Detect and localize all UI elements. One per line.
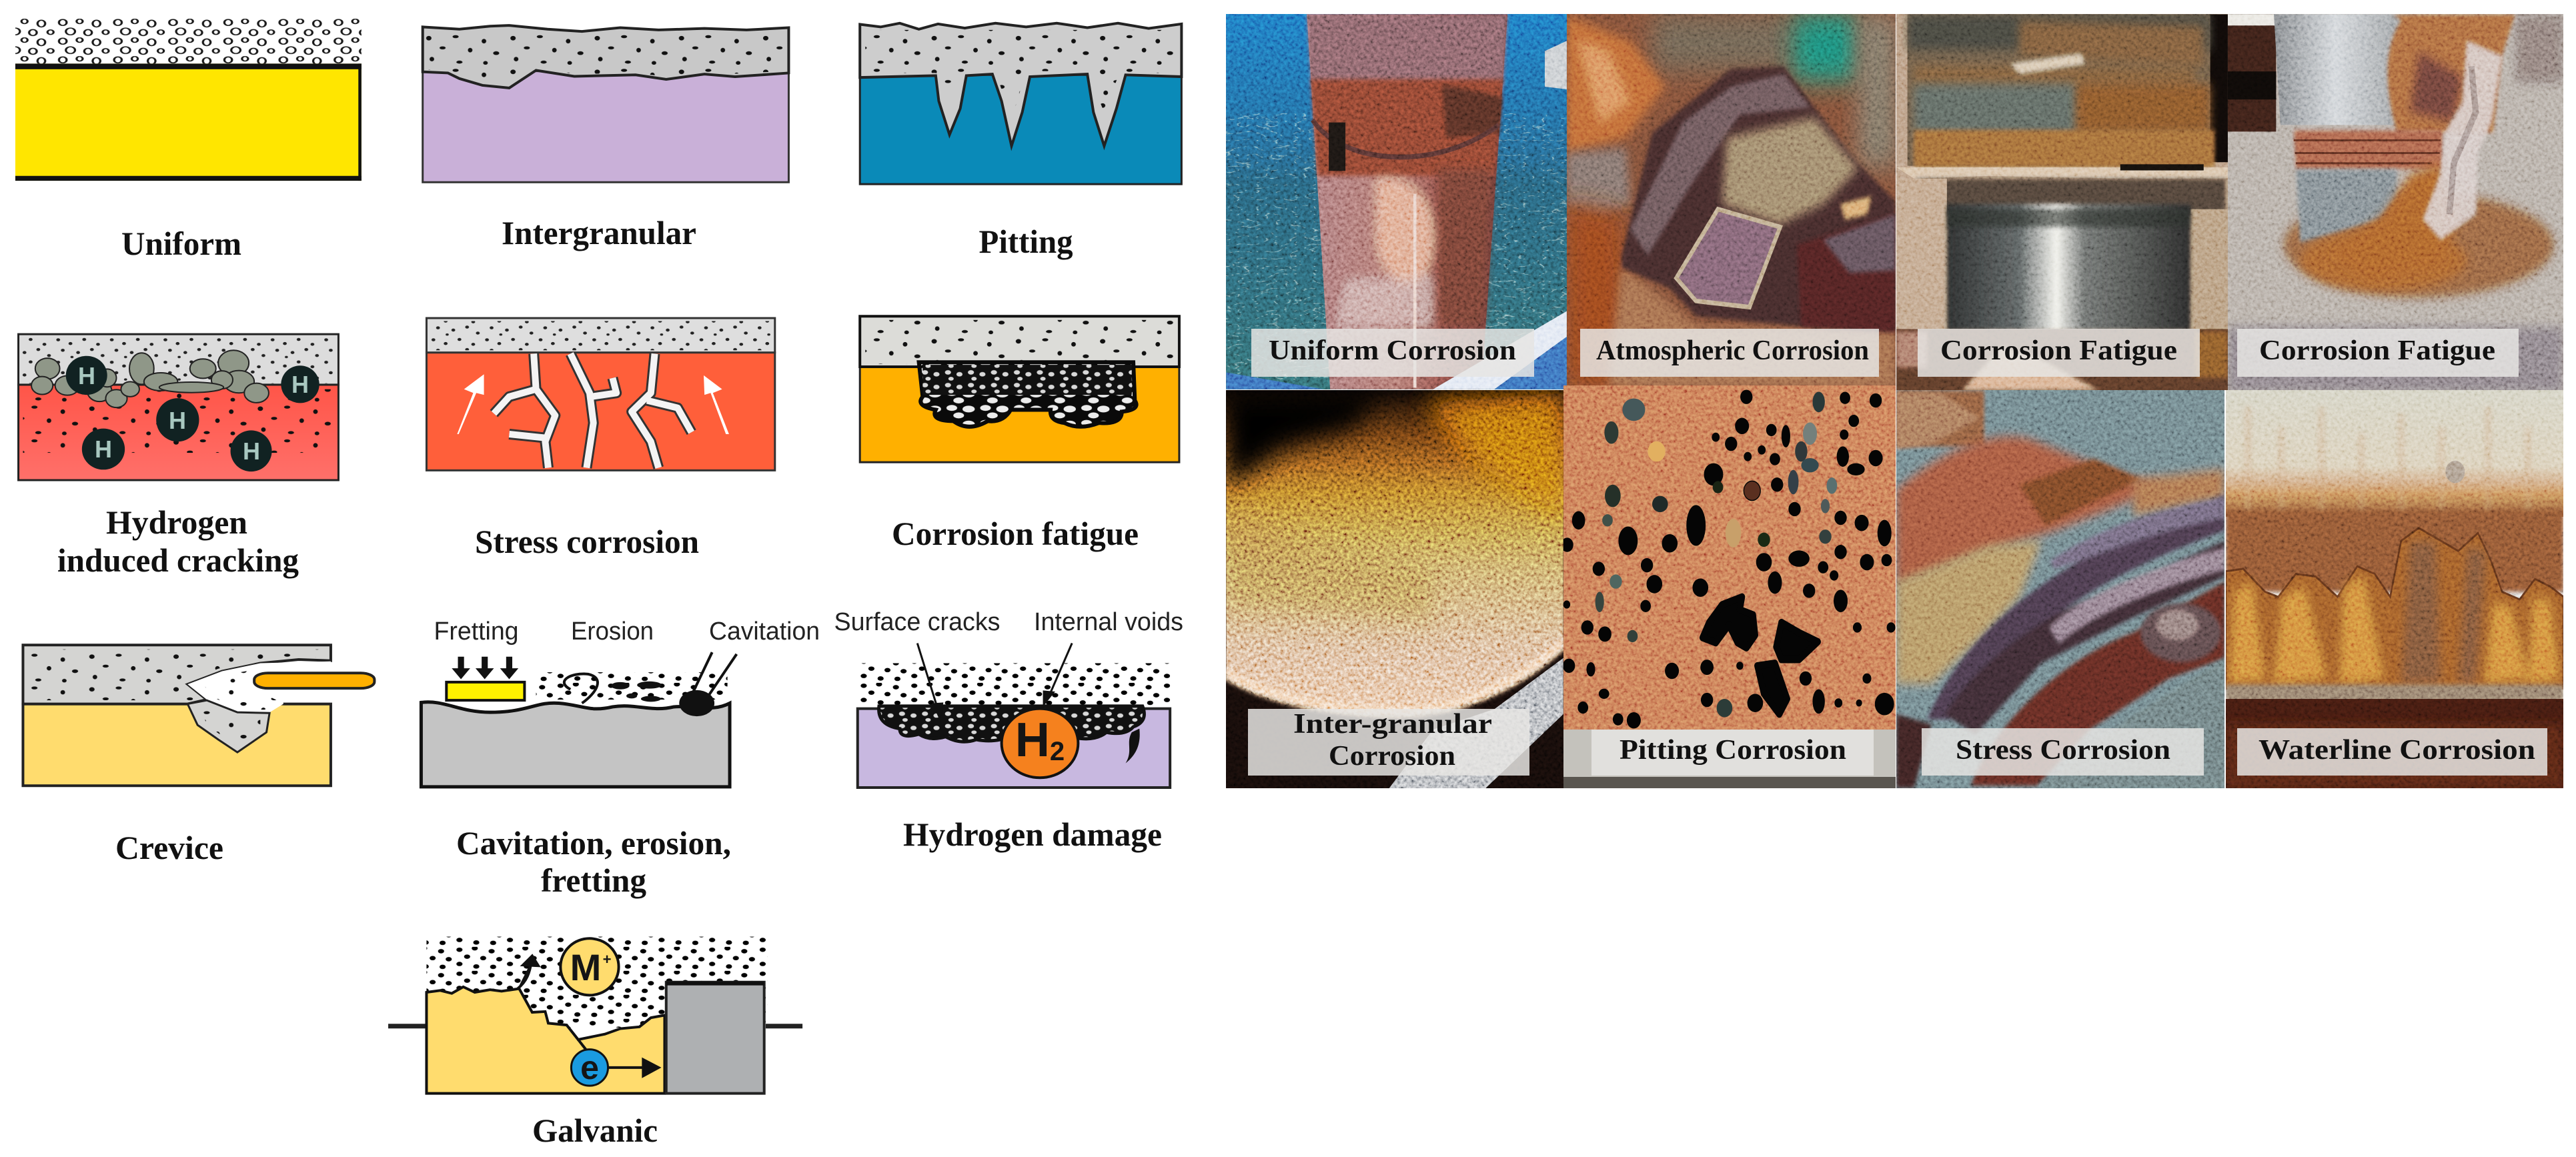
caption box: [2237, 728, 2547, 776]
arrow: right stress: [704, 375, 729, 434]
hydrogen atom letters: [78, 362, 309, 465]
bubble letters H2: 2: [1050, 737, 1065, 766]
caption: Atmospheric Corrosion: [1596, 335, 1869, 366]
ion and electron letters: M: [570, 946, 601, 988]
photo: stress corrosion: [1896, 390, 2224, 788]
label: Corrosion fatigue: Corrosion fatigue: [892, 515, 1139, 552]
caption: Uniform Corrosion: [1269, 335, 1516, 366]
diagram: corroded cavity in amber metal: [860, 316, 1179, 462]
hydrogen atom letters: H: [291, 371, 309, 398]
annotations: surface cracks, internal voids: [834, 608, 1183, 636]
hydrogen atom letters: H: [243, 437, 260, 465]
hydrogen atom letters: H: [78, 362, 95, 389]
caption box: [2237, 329, 2519, 377]
ion and electron letters: +: [603, 951, 611, 968]
caption, two lines: [1293, 709, 1492, 772]
caption: Waterline Corrosion: [2259, 735, 2535, 766]
hydrogen atom letters: H: [95, 435, 112, 463]
panel: intergranular corrosion diagram: [423, 25, 788, 251]
diagram: pits in blue metal: [860, 23, 1181, 184]
annotations: surface cracks, internal voids: Surface cracks: [834, 608, 1001, 636]
caption: Pitting Corrosion: [1620, 735, 1846, 766]
diagram: grey metal with wear features: [421, 652, 736, 787]
diagram: hydrogen blisters in red metal: [19, 334, 338, 480]
panel: hydrogen damage diagram: [834, 608, 1183, 853]
label: Hydrogen induced cracking: induced cracking: [57, 541, 299, 579]
pits: [1561, 389, 1896, 728]
arrow: left stress: [457, 374, 484, 434]
panel: uniform corrosion diagram: [15, 19, 362, 262]
panel: galvanic corrosion diagram: [388, 937, 802, 1149]
arrow: ion release: [518, 956, 538, 989]
diagram: crevice under a gasket: [23, 645, 374, 786]
diagram: voids and hydrogen bubble in lilac metal: [858, 644, 1170, 788]
panel: pitting corrosion diagram: [860, 23, 1181, 260]
diagram: branching cracks in orange-red metal: [426, 318, 775, 470]
arrow: electron flow: [609, 1060, 658, 1076]
arrow: surface cracks: [917, 644, 943, 722]
label: Cavitation, erosion, fretting: Cavitation, erosion,: [456, 824, 731, 862]
panel: cavitation, erosion, fretting diagram: [421, 618, 820, 899]
caption box: [1922, 728, 2204, 776]
photo: waterline corrosion: [2226, 390, 2563, 788]
corroded ribs: [1927, 495, 2224, 786]
photo: pitting corrosion: [1561, 385, 1896, 788]
annotations: surface cracks, internal voids: Internal voids: [1034, 608, 1183, 636]
caption box: [1918, 329, 2200, 377]
caption: Stress Corrosion: [1956, 735, 2170, 766]
gasket: [254, 673, 374, 688]
caption box: [1591, 730, 1874, 776]
panel: stress corrosion diagram: [426, 318, 775, 560]
label: Pitting: Pitting: [979, 223, 1073, 260]
caption, two lines: Inter-granular: [1293, 709, 1492, 740]
label: Intergranular: Intergranular: [502, 214, 696, 251]
diagram: galvanic couple: [388, 937, 802, 1094]
label: Hydrogen damage: Hydrogen damage: [903, 816, 1162, 853]
annotations: fretting, erosion, cavitation: Erosion: [571, 618, 654, 646]
panel: corrosion fatigue diagram: [860, 316, 1179, 552]
photo: uniform corrosion: [1226, 14, 1567, 389]
diagram: uniform layer over yellow metal: [15, 19, 362, 181]
label: Crevice: Crevice: [115, 829, 223, 866]
electron: [571, 1050, 608, 1086]
caption, two lines: Corrosion: [1329, 741, 1455, 772]
diagram: intergranular attack on lilac metal: [423, 25, 788, 182]
label: Galvanic: Galvanic: [532, 1112, 658, 1149]
photo: corrosion fatigue, fractured shaft: [1896, 14, 2228, 393]
bubble letters H2: H: [1015, 714, 1050, 767]
panel: hydrogen induced cracking diagram: [19, 334, 338, 579]
caption box: [1248, 709, 1529, 776]
label: Cavitation, erosion, fretting: fretting: [541, 862, 646, 899]
label: Hydrogen induced cracking: [57, 503, 299, 579]
photo: corrosion fatigue, rusted pipe base: [2228, 14, 2563, 393]
photo: atmospheric corrosion: [1567, 14, 1898, 387]
label: Cavitation, erosion, fretting: [456, 824, 731, 899]
caption: Corrosion Fatigue: [2259, 335, 2495, 366]
photo: inter-granular corrosion: [1226, 390, 1563, 788]
panel: crevice corrosion diagram: [23, 645, 374, 866]
label: Stress corrosion: Stress corrosion: [475, 523, 699, 560]
label: Hydrogen induced cracking: Hydrogen: [106, 503, 247, 541]
ion and electron letters: [570, 946, 611, 1086]
annotations: fretting, erosion, cavitation: Fretting: [434, 618, 519, 646]
label: Uniform: Uniform: [121, 225, 241, 262]
hydrogen bubble: [1002, 709, 1078, 778]
caption box: [1251, 329, 1534, 377]
hydrogen atom letters: H: [169, 407, 186, 434]
arrow: internal voids: [1043, 644, 1072, 707]
annotations: fretting, erosion, cavitation: [434, 618, 820, 646]
annotations: fretting, erosion, cavitation: Cavitation: [709, 618, 820, 646]
caption: Corrosion Fatigue: [1940, 335, 2177, 366]
caption box: [1580, 329, 1879, 377]
ion and electron letters: e: [580, 1049, 599, 1086]
metal ion: [560, 938, 619, 995]
